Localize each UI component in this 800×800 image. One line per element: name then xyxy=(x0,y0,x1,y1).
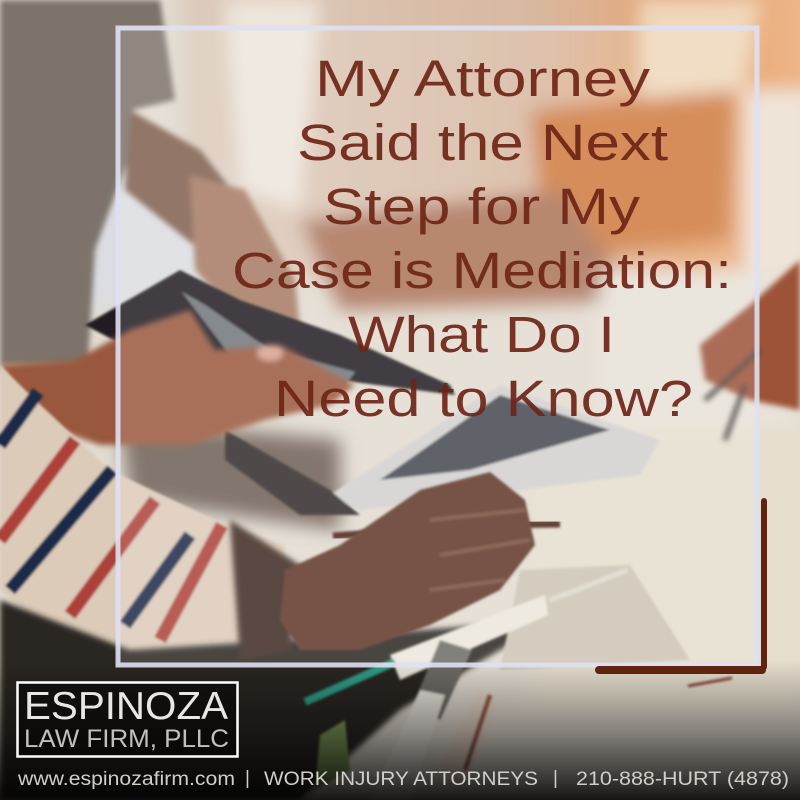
sub: notebook and pens xyxy=(305,565,732,800)
sub: striped sleeve xyxy=(0,365,285,655)
footer contact line: | xyxy=(245,768,250,789)
footer contact line xyxy=(17,768,789,790)
corner accent bracket xyxy=(595,498,767,674)
title: Case is Mediation: xyxy=(232,242,732,299)
footer contact line: www.espinozafirm.com xyxy=(17,769,235,790)
title: Said the Next xyxy=(297,114,668,171)
sub: pen behind hand xyxy=(333,524,560,536)
title: Step for My xyxy=(323,178,641,235)
sub: upper hand xyxy=(0,310,355,445)
sub: right hand and glasses xyxy=(700,260,800,440)
sub: laptop xyxy=(225,385,660,515)
sub: bottom dark area xyxy=(0,520,550,800)
sub: lower hand xyxy=(280,472,535,650)
logo: Espinoza Law Firm: LAW FIRM, PLLC xyxy=(24,725,229,753)
footer contact line: WORK INJURY ATTORNEYS xyxy=(264,769,538,790)
footer contact line: | xyxy=(553,768,558,789)
sub: phone and tablet xyxy=(85,270,455,395)
title xyxy=(232,50,732,427)
title: Need to Know? xyxy=(274,370,693,427)
sub: grey sweater xyxy=(0,0,300,365)
footer contact line: 210-888-HURT (4878) xyxy=(576,769,789,790)
sub: bottom shading xyxy=(0,660,800,800)
logo: Espinoza Law Firm xyxy=(18,682,238,756)
title: What Do I xyxy=(348,306,615,363)
translucent panel frame xyxy=(118,28,757,665)
title: My Attorney xyxy=(315,50,651,107)
logo: Espinoza Law Firm: ESPINOZA xyxy=(24,685,228,728)
